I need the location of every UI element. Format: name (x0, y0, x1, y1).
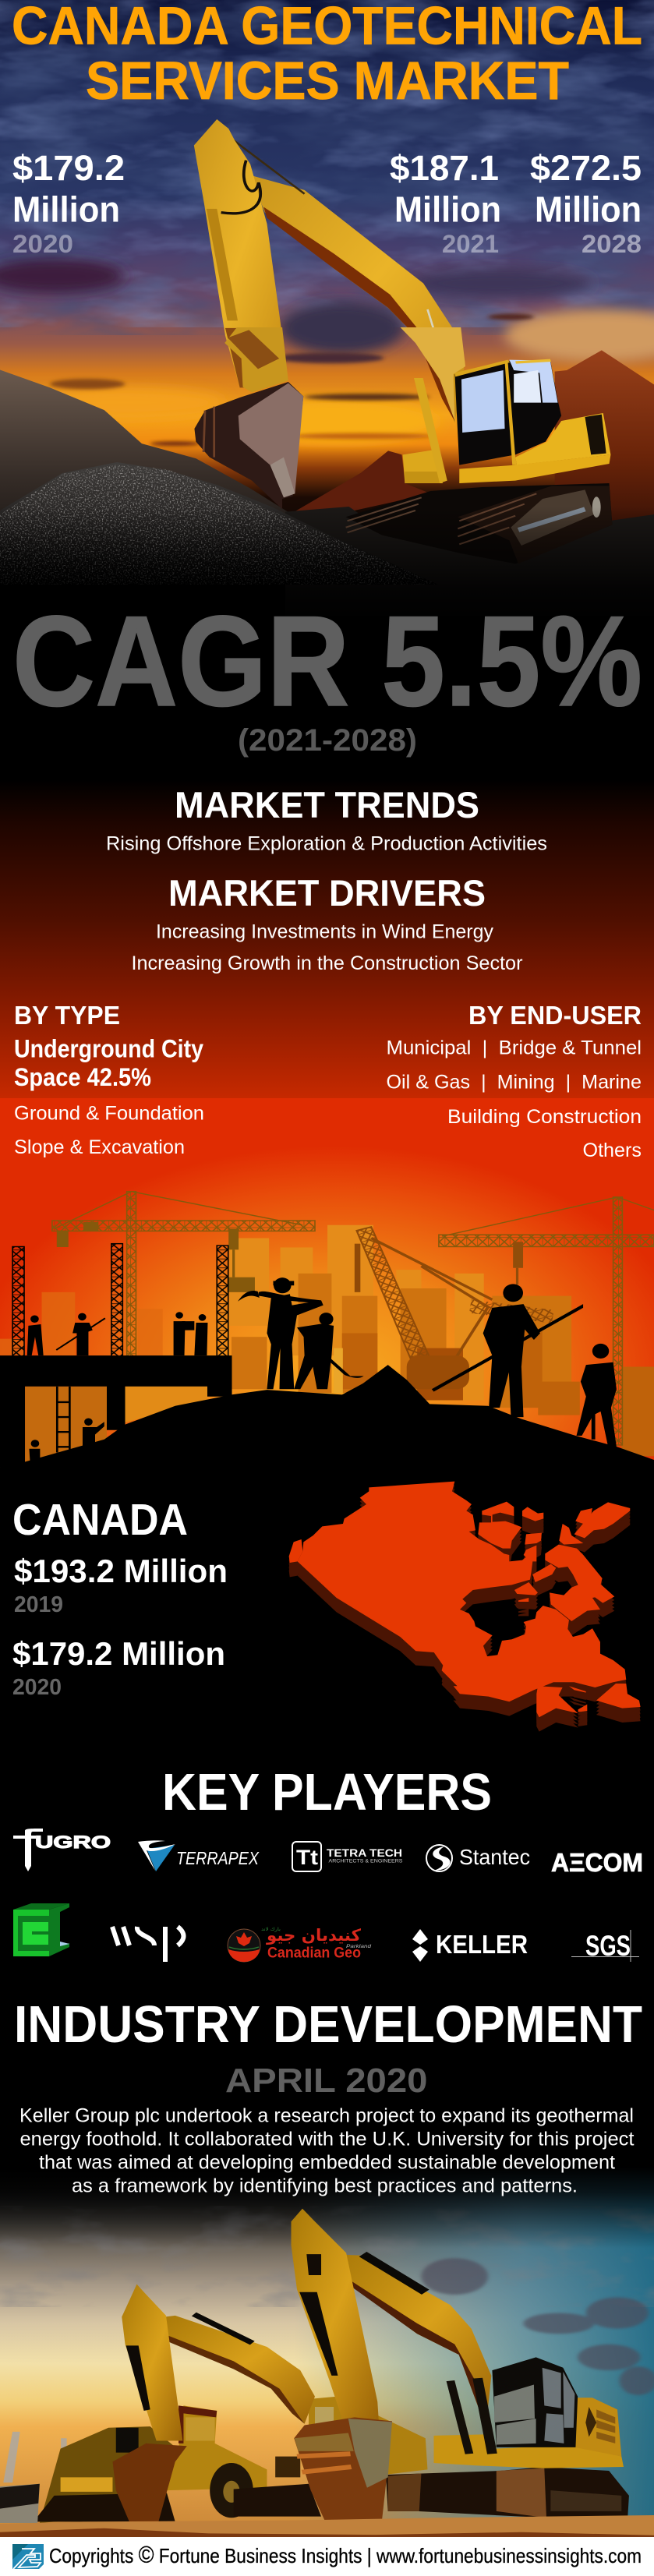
map of canada (289, 1482, 641, 1732)
logo: Canadian Geo (228, 1926, 372, 1962)
industry development paragraph: Keller Group plc undertook a research project to expand its geothermal (19, 2104, 634, 2126)
canada heading and figures (12, 1495, 228, 1700)
stat: 2020: $179.2 (12, 148, 125, 188)
stat: 2021: Million (394, 189, 501, 229)
small excavator bucket (112, 2443, 187, 2521)
logo: Fugro (13, 1829, 111, 1871)
by type (14, 1001, 204, 1158)
title: SERVICES MARKET (86, 51, 569, 111)
dark ground (285, 507, 654, 624)
logo: Stantec (426, 1845, 530, 1871)
footer (0, 2537, 654, 2576)
skyline (0, 1225, 654, 1456)
small excavator arm (122, 2284, 182, 2441)
logo: Tetra Tech: TETRA TECH (327, 1847, 402, 1859)
logo: WSP (112, 1927, 184, 1962)
arm foot (224, 327, 288, 392)
sunset construction panel (0, 1098, 654, 1542)
logo: green block (13, 1903, 69, 1956)
canada heading and figures: 2019 (14, 1592, 63, 1617)
canada heading and figures: $193.2 Million (14, 1553, 228, 1589)
logo: Canadian Geo: Canadian Geo (267, 1945, 361, 1961)
logo: Tetra Tech: Tt (296, 1846, 318, 1869)
wheel loader (167, 2405, 267, 2518)
worker with shovel (294, 1313, 364, 1389)
footer logo (12, 2544, 44, 2569)
by type: BY TYPE (14, 1001, 120, 1030)
market drivers: MARKET DRIVERS (168, 872, 486, 913)
market drivers: Increasing Growth in the Construction Sector (131, 952, 522, 974)
canada heading and figures: $179.2 Million (12, 1635, 225, 1672)
big excavator cab (492, 2357, 578, 2447)
market trends: MARKET TRENDS (175, 784, 479, 825)
by type: Slope & Excavation (14, 1136, 185, 1158)
stat: 2021 (390, 148, 501, 258)
gravel foreground (0, 462, 438, 585)
stat: 2020: 2020 (12, 230, 73, 258)
excavator cab (454, 359, 561, 465)
big excavator tracks (386, 2467, 629, 2518)
by end-user: BY END-USER (468, 1001, 642, 1030)
stat: 2028: 2028 (582, 230, 642, 258)
market drivers: Increasing Investments in Wind Energy (156, 921, 493, 943)
dirt mound: left (0, 369, 334, 585)
market trends (106, 784, 547, 854)
dirt mound: right (555, 350, 654, 528)
by type: Ground & Foundation (14, 1102, 204, 1124)
small excavator tracks and body (234, 2397, 427, 2517)
stat: 2028: $272.5 (530, 148, 642, 188)
by end-user: Oil & Gas | Mining | Marine (387, 1071, 642, 1093)
hill silhouette (0, 1365, 654, 1542)
logo: Terrapex (138, 1840, 260, 1871)
logo: Canadian Geo: Parkland (346, 1945, 372, 1949)
logo: Fugro: UGRO (35, 1832, 111, 1852)
distant towers (3, 2432, 67, 2482)
dirt mound: centre (295, 451, 430, 512)
by type: Underground City (14, 1035, 203, 1063)
industry development date: APRIL 2020 (225, 2062, 427, 2100)
big excavator bucket (294, 2417, 392, 2523)
small excavator boom (158, 2316, 315, 2424)
concrete building (0, 1355, 232, 1468)
dark to red gradient panel (0, 616, 654, 1098)
big excavator boom (334, 2254, 491, 2428)
excavator boom root (401, 327, 465, 421)
big excavator body (434, 2398, 624, 2468)
industry development paragraph: that was aimed at developing embedded sustainable development (39, 2151, 615, 2173)
hero photo: excavator at sunset (0, 0, 654, 624)
excavator body (403, 378, 610, 483)
stat: 2020: Million (12, 189, 120, 229)
industry development paragraph: energy foothold. It collaborated with the U.K. University for this project (20, 2128, 635, 2150)
bulldozer (0, 2426, 183, 2523)
key players heading: KEY PLAYERS (162, 1763, 492, 1822)
logo: Keller (412, 1929, 528, 1962)
logo: Tetra Tech (292, 1842, 403, 1871)
ground (0, 2515, 654, 2539)
tower crane right (439, 1197, 654, 1445)
stat: 2028 (530, 148, 642, 258)
logo: Canadian Geo: بارك لاند (261, 1927, 281, 1932)
excavator bucket (194, 382, 303, 509)
worker with pickaxe (238, 1277, 323, 1389)
by end-user: Building Construction (447, 1106, 642, 1128)
stat: 2020 (12, 148, 125, 258)
logo: Tetra Tech: ARCHITECTS & ENGINEERS (329, 1858, 403, 1864)
big excavator arm (291, 2209, 379, 2421)
canada heading and figures: CANADA (12, 1495, 188, 1545)
logo: AECOM: AΞCOM (551, 1848, 643, 1877)
logo: SGS: SGS (585, 1930, 631, 1962)
by end-user: Municipal | Bridge & Tunnel (387, 1037, 642, 1058)
excavator arm and boom (194, 119, 465, 423)
logo: Canadian Geo: كنيديان جيو (266, 1926, 362, 1945)
small workers on slab (27, 1312, 207, 1461)
worker with pole (432, 1284, 583, 1417)
by end-user (387, 1001, 642, 1161)
market trends: Rising Offshore Exploration & Production Activities (106, 832, 547, 854)
bottom photo: excavators at dusk (0, 2167, 654, 2539)
title (12, 0, 642, 111)
by end-user: Others (583, 1140, 642, 1161)
crawler crane (355, 1227, 554, 1389)
tower crane left (52, 1192, 315, 1358)
worker with jackhammer (577, 1344, 617, 1447)
CAGR period: (2021-2028) (238, 723, 417, 758)
logo: Terrapex: TERRAPEX (176, 1848, 260, 1868)
stat: 2021: 2021 (442, 230, 499, 258)
stat: 2028: Million (535, 189, 642, 229)
logo: Keller: KELLER (436, 1930, 528, 1959)
logo: Stantec: Stantec (459, 1845, 530, 1869)
industry development paragraph: as a framework by identifying best practices and patterns. (72, 2175, 578, 2196)
stat: 2021: $187.1 (390, 148, 499, 188)
market drivers (131, 872, 522, 974)
by type: Space 42.5% (14, 1063, 151, 1091)
excavator tracks (346, 483, 612, 564)
scaffolds (12, 1244, 228, 1357)
canada heading and figures: 2020 (12, 1675, 62, 1700)
industry development paragraph (19, 2104, 635, 2196)
